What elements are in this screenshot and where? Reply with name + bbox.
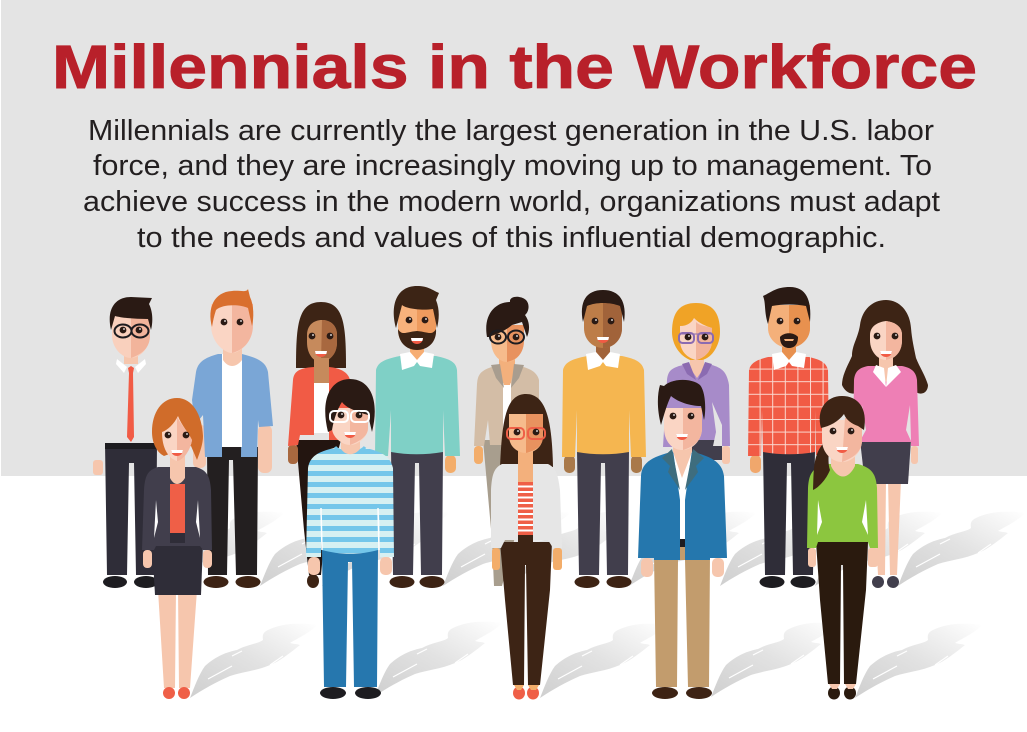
person: woman in coral cardigan [288,302,350,588]
floor shadows [157,512,1025,698]
intro text block: to the needs and values of this influential demographic. [137,222,886,254]
intro text block [83,115,940,254]
person: front woman with red glasses and white cardigan [491,394,562,700]
person: front man in striped sweater [306,379,394,699]
title: Millennials in the Workforce [52,33,977,101]
person: man with tie and glasses [93,297,158,588]
person: man in blue cardigan [192,289,273,588]
person: bearded man in teal sweater [375,286,460,588]
person: front man in blue blazer [638,380,727,699]
intro text block: force, and they are increasingly moving up to management. To [93,150,932,182]
person: woman in pink top [842,300,928,588]
person: front woman in green top [807,396,878,700]
background: grey wall [1,0,1027,476]
person: woman in purple jacket [663,303,730,464]
person: man in plaid shirt [748,287,829,588]
person: front woman with red hair in dark blazer [142,398,212,699]
intro text block: achieve success in the modern world, organizations must adapt [83,186,940,218]
intro text block: Millennials are currently the largest generation in the U.S. labor [88,115,934,147]
person: man in yellow sweater [562,290,646,588]
person: woman in beige jacket [474,297,539,586]
